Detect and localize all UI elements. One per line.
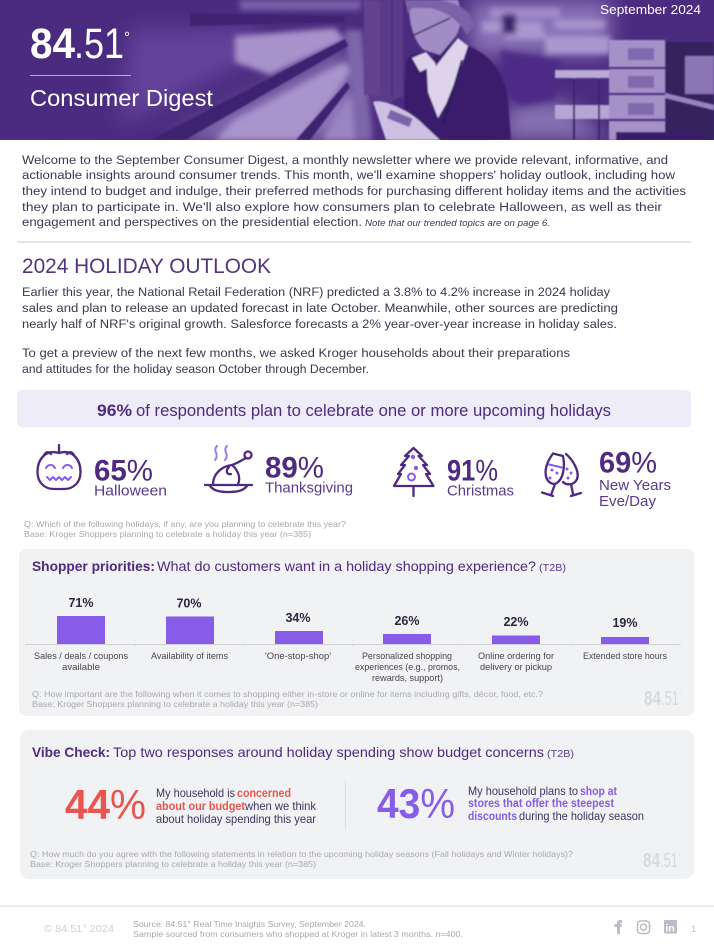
stat: 43%: discounts [468, 809, 517, 823]
stat: 44% [65, 781, 317, 828]
panel: shopper priorities [19, 549, 694, 716]
intro text block: Welcome to the September Consumer Digest, a monthly newsletter where we provide relevant, informative, and [22, 153, 668, 167]
icon: pumpkin [38, 445, 80, 489]
stat: 43%: during the holiday season [519, 809, 644, 823]
survey note: holidays: Base: Kroger Shoppers planning to celebrate a holiday this year (n=385) [24, 529, 311, 539]
stat: 44%: 44% [65, 781, 146, 828]
panel: vibe check [20, 730, 694, 879]
logo watermark: .51 [661, 688, 679, 710]
outlook paragraph: and attitudes for the holiday season October through December. [22, 362, 369, 376]
outlook paragraph [22, 285, 618, 376]
stat: Christmas 91% [447, 454, 514, 500]
survey note: holidays [24, 519, 346, 539]
stat: Thanksgiving 89% [265, 452, 353, 496]
heading: 2024 holiday outlook: 2024 HOLIDAY OUTLOOK [22, 255, 271, 278]
logo watermark: .51 [660, 850, 678, 872]
bar chart: experiences (e.g., promos, [355, 662, 460, 673]
stat: Halloween 65% [94, 454, 167, 500]
bar chart: Availability of items [151, 651, 228, 662]
icon: linkedin [664, 920, 677, 934]
intro text block: actionable insights around consumer trends. This month, we'll examine shoppers' holiday outlook, including how [22, 168, 675, 182]
bar chart: available [62, 662, 100, 673]
date: September 2024 [600, 3, 701, 17]
woman [373, 0, 511, 140]
stat: Thanksgiving 89%: Thanksgiving [265, 480, 353, 496]
survey note: priorities: Q: How important are the following when it comes to shopping either in-store or online for items including gifts, décor, food, etc.? [32, 689, 543, 699]
panel heading: (T2B) [547, 749, 574, 760]
bar chart: 26% [394, 614, 420, 628]
stat: New Years 69%: New Years [599, 478, 671, 494]
logo watermark: 84 [644, 688, 662, 710]
stat: 43%: shop at [580, 784, 617, 798]
stat: Christmas 91%: 91% [447, 454, 498, 488]
panel heading: (T2B) [539, 563, 566, 574]
boxes and right shelving [555, 40, 714, 140]
icon: instagram [638, 921, 650, 934]
bar chart [26, 596, 680, 684]
logo watermark: ° [678, 853, 681, 861]
stat: Halloween 65%: Halloween [94, 484, 167, 500]
stat: Christmas 91%: Christmas [447, 484, 514, 500]
logo watermark: 84 [643, 850, 661, 872]
icon: christmas tree [394, 448, 434, 496]
title: Consumer Digest [30, 85, 214, 111]
stat: 44%: about our budget [156, 799, 245, 813]
survey note: vibe check [30, 849, 573, 869]
shelves [150, 0, 403, 140]
outlook paragraph: sales and plan to release an updated forecast in late October. Meanwhile, other sources are predicting [22, 301, 618, 315]
footer source: Sample sourced from consumers who shopped at Kroger in latest 3 months. n=400. [133, 929, 463, 939]
bar chart: 71% [68, 596, 94, 610]
stat: Halloween 65%: 65% [94, 454, 153, 488]
bar chart: 70% [176, 596, 202, 610]
survey note: vibe check: Q: How much do you agree with the following statements in relation to the upcoming holiday seasons (Fall holidays and Winter holidays)? [30, 849, 573, 859]
logo: .51 [74, 20, 124, 68]
bar chart: 34% [285, 611, 311, 625]
intro text block: they intend to budget and indulge, their preferred methods for purchasing different holiday items and the activities [22, 184, 686, 198]
logo watermark: ° [679, 691, 682, 699]
bar chart: 22% [503, 615, 529, 629]
stat: 43%: stores that offer the steepest [468, 796, 614, 810]
bar chart: rewards, support) [372, 673, 443, 684]
survey note: priorities: Base: Kroger Shoppers planning to celebrate a holiday this year (n=385) [32, 699, 318, 709]
stat: New Years 69%: 69% [599, 446, 657, 480]
bar chart: Sales / deals / coupons [34, 651, 128, 662]
bar chart: delivery or pickup [480, 662, 552, 673]
survey note: vibe check: Base: Kroger Shoppers planning to celebrate a holiday this year (n=385) [30, 859, 316, 869]
stat: 44%: about holiday spending this year [156, 812, 316, 826]
stat: New Years 69%: Eve/Day [599, 494, 657, 510]
stat: 43% [377, 780, 644, 827]
panel heading: Top two responses around holiday spending show budget concerns [113, 744, 544, 760]
survey note: holidays: Q: Which of the following holidays, if any, are you planning to celebrate this year? [24, 519, 346, 529]
survey note: priorities [32, 689, 543, 709]
intro text block: Note that our trended topics are on page 6. [365, 218, 550, 228]
logo watermark [643, 850, 681, 872]
logo watermark [644, 688, 682, 710]
intro text block [22, 153, 686, 229]
callout: 96% plan to celebrate [17, 390, 691, 428]
outlook paragraph: Earlier this year, the National Retail Federation (NRF) predicted a 3.8% to 4.2% increase in 2024 holiday [22, 285, 611, 299]
panel heading: Vibe Check: [32, 744, 110, 760]
icon: facebook [614, 920, 622, 934]
bar chart: Online ordering for [478, 651, 554, 662]
stat: 44%: My household is [156, 786, 235, 800]
bar chart: Personalized shopping [362, 651, 452, 662]
logo: ° [124, 29, 130, 46]
stat: 43%: My household plans to [468, 784, 578, 798]
footer copyright: © 84.51° 2024 [44, 923, 114, 935]
outlook paragraph: To get a preview of the next few months, we asked Kroger households about their preparations [22, 346, 570, 360]
icon: champagne glasses [542, 454, 581, 496]
hero banner [0, 0, 714, 140]
stat: 43%: 43% [377, 780, 455, 827]
stat: 44%: when we think [244, 799, 317, 813]
bar chart: 'One-stop-shop' [265, 651, 331, 662]
bar chart: 19% [612, 616, 638, 630]
stat: New Years 69% [599, 446, 671, 510]
panel heading [32, 558, 566, 574]
panel heading: Shopper priorities: [32, 558, 155, 574]
outlook paragraph: nearly half of NRF's original growth. Salesforce forecasts a 2% year-over-year increase in holiday sales. [22, 317, 617, 331]
intro text block: engagement and perspectives on the presidential election. [22, 215, 362, 229]
intro text block: they plan to participate in. We'll also explore how consumers plan to celebrate Halloween, as well as their [22, 200, 662, 214]
logo: 84 [30, 20, 75, 68]
icon: roast turkey [205, 446, 252, 492]
page number: 1 [691, 924, 696, 934]
stat: Thanksgiving 89%: 89% [265, 452, 324, 484]
callout: 96% plan to celebrate: 96% [97, 402, 132, 420]
footer source [133, 919, 463, 939]
callout: 96% plan to celebrate: of respondents plan to celebrate one or more upcoming holidays [136, 402, 611, 420]
panel heading: What do customers want in a holiday shopping experience? [157, 558, 536, 574]
icon: linkedin: in [666, 922, 675, 934]
logo [31, 28, 130, 58]
stat: 44%: concerned [237, 786, 291, 800]
bar chart: Extended store hours [583, 651, 667, 662]
footer source: Source: 84.51° Real Time Insights Survey, September 2024. [133, 919, 366, 929]
